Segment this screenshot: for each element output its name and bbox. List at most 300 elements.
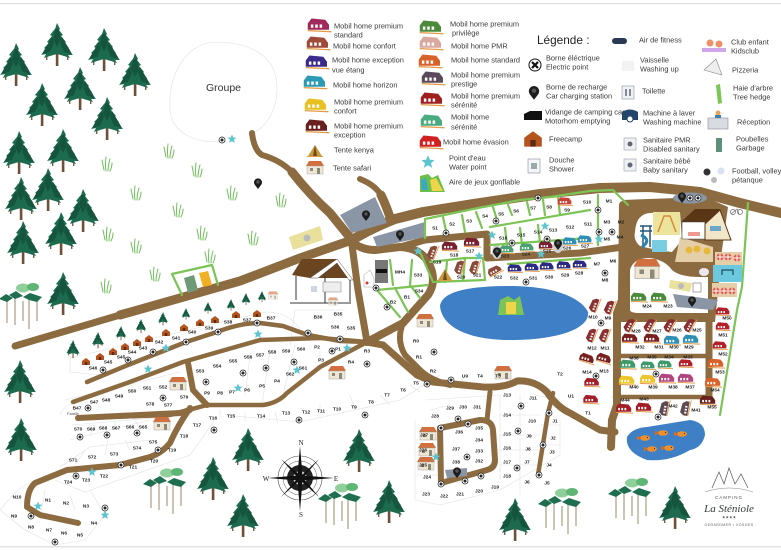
plot numbers: M37 [685, 384, 695, 390]
logo: camping La Sténiole [703, 468, 754, 527]
plot numbers: J37 [452, 446, 460, 452]
plot numbers: P8 [217, 390, 223, 396]
plot numbers: S15 [517, 232, 526, 238]
plot numbers: S65 [139, 424, 148, 430]
plot numbers: S69 [87, 426, 96, 432]
plot numbers: T23 [82, 478, 90, 484]
plot numbers: N7 [46, 528, 52, 534]
legend: services column 5: pétanque [732, 176, 763, 184]
garbage area bins [184, 271, 212, 293]
legend: services column 5: Pizzeria [732, 66, 759, 74]
plot numbers: P9 [204, 390, 210, 396]
plot numbers: J33 [475, 448, 483, 454]
plot numbers: T5 [413, 380, 419, 386]
legend: services column 4: Washing up [640, 64, 679, 74]
plot numbers: S27 [581, 244, 590, 250]
legend: mobile homes column 2: Mobil home standard [451, 56, 520, 64]
plot numbers: S60 [297, 346, 306, 352]
plot numbers: M6 [610, 258, 617, 264]
plot numbers: J6 [524, 480, 530, 486]
legend: mobile homes column 2: privilège [452, 28, 480, 38]
plot numbers: S17 [466, 248, 475, 254]
plot numbers: M9 [605, 316, 612, 322]
plot numbers: T6 [400, 388, 406, 394]
plot numbers: S41 [172, 336, 181, 342]
legend: mobile homes column 2: sérénité [451, 122, 477, 132]
plot numbers: S24 [522, 252, 531, 258]
legend: services column 4: Sanitaire PMR [643, 136, 691, 144]
main building [290, 259, 353, 304]
logo: camping La Sténiole: ★★★★ [722, 514, 737, 520]
plot numbers: M14 [582, 370, 592, 376]
legend: services column 4: Toilette [642, 86, 665, 96]
legend: services column 5: Haie d'arbre [733, 84, 773, 92]
legend: services column 3: Vidange de camping car [545, 108, 625, 116]
plot numbers: R3 [364, 348, 370, 354]
plot numbers: M42 [668, 404, 678, 410]
plot numbers: T12 [302, 410, 310, 416]
plot numbers: M53 [715, 370, 725, 376]
legend: services column 5: Poubelles [736, 134, 769, 144]
legend: mobile homes column 2: Mobil home premium [450, 20, 519, 28]
plot numbers: T1 [585, 410, 591, 416]
plot numbers: S79 [180, 394, 189, 400]
legend: mobile homes column 1 [304, 18, 404, 174]
plot numbers: M2 [618, 220, 625, 226]
plot numbers: M10 [588, 314, 598, 320]
plot numbers: J23 [422, 492, 430, 498]
plot numbers: J10 [528, 418, 536, 424]
plot numbers: S55 [229, 358, 238, 364]
plot numbers: N4 [91, 520, 97, 526]
plot numbers: J20 [475, 488, 483, 494]
legend: mobile homes column 2: Aire de jeux gonflable [449, 178, 520, 186]
legend: mobile homes column 2: Point d'eau [449, 154, 486, 162]
plot numbers: J8 [525, 446, 531, 452]
legend: services column 3: Borne éléctrique [546, 54, 600, 62]
plot numbers: N3 [83, 504, 89, 510]
plot numbers: J1 [552, 418, 558, 424]
plot numbers: T21 [129, 464, 137, 470]
plot numbers: J32 [475, 458, 483, 464]
legend: mobile homes column 2: sérénité [451, 100, 477, 110]
plot numbers: P3 [318, 358, 324, 364]
legend: mobile homes column 2: Mobil home PMR [451, 42, 508, 50]
logo: camping La Sténiole: CAMPING [715, 495, 743, 500]
plot numbers: S54 [213, 364, 222, 370]
plot numbers: P6 [244, 388, 250, 394]
plot numbers: S32 [510, 276, 519, 282]
plot numbers: T20 [150, 458, 158, 464]
plot numbers: S9 [564, 208, 570, 214]
plot numbers: M5 [604, 236, 611, 242]
compass rose: E [334, 475, 338, 483]
legend: services column 5: Tree hedge [733, 92, 771, 102]
plot numbers: S56 [244, 354, 253, 360]
plot numbers: B36 [314, 314, 323, 320]
legend: mobile homes column 2: Mobil home premium [451, 92, 520, 100]
plot numbers: M4 [617, 234, 624, 240]
plot numbers: M34 [664, 354, 674, 360]
plot numbers: S78 [146, 402, 155, 408]
plot numbers [11, 198, 732, 538]
plot numbers: J35 [475, 426, 483, 432]
legend: services column 3: Shower [549, 164, 575, 174]
plot numbers: P1 [335, 346, 341, 352]
plot numbers: T4 [477, 374, 483, 380]
plot numbers: B47 [73, 406, 82, 412]
logo: camping La Sténiole: GERARDMER • VOSGES [704, 523, 754, 527]
plot numbers: S16 [499, 236, 508, 242]
plot numbers: S22 [494, 274, 503, 280]
plot numbers: S25 [543, 248, 552, 254]
plot numbers: M8 [602, 278, 609, 284]
compass rose: N [298, 439, 304, 447]
plot numbers: J18 [503, 474, 511, 480]
plot numbers: N5 [77, 532, 83, 538]
small pines row [66, 291, 266, 358]
plot numbers: J36 [455, 430, 463, 436]
plot numbers: S12 [566, 224, 575, 230]
legend: services column 3: Electric point [546, 62, 588, 72]
plot numbers: R0 [413, 338, 419, 344]
legend: mobile homes column 1: confort [334, 106, 357, 116]
plot numbers: S74 [133, 446, 142, 452]
plot numbers: M30 [669, 344, 679, 350]
parking areas [340, 192, 718, 478]
legend: mobile homes column 1: Mobil home confort [333, 42, 396, 50]
legend: mobile homes column 1: Tente safari [333, 164, 372, 172]
plot numbers: T8 [368, 400, 374, 406]
plot numbers: J5 [544, 480, 550, 486]
plot numbers: J25 [419, 462, 427, 468]
plot numbers: M35 [647, 354, 657, 360]
plot numbers: M29 [684, 344, 694, 350]
plot numbers: S39 [205, 326, 214, 332]
plot numbers: S8 [546, 204, 552, 210]
legend: services column 3: Borne de recharge [546, 82, 607, 92]
plot numbers: J38 [452, 460, 460, 466]
plot numbers: B37 [267, 316, 276, 322]
plot numbers: S52 [159, 384, 168, 390]
plot numbers: S46 [89, 366, 98, 372]
legend: services column 4: Disabled sanitary [643, 144, 700, 154]
plot numbers: T13 [282, 410, 290, 416]
plot numbers: S59 [282, 348, 291, 354]
plot numbers: M24 [642, 304, 652, 310]
plot numbers: S62 [286, 372, 295, 378]
plot numbers: T9 [351, 404, 357, 410]
camping car station and reception [364, 269, 387, 287]
plot numbers: S21 [473, 272, 482, 278]
legend: services column 3: Douche [549, 156, 574, 164]
legend: services column 3: Car charging station [546, 92, 612, 100]
plot numbers: S23 [501, 254, 510, 260]
plot numbers: N9 [11, 514, 17, 520]
plot numbers: M26 [672, 328, 682, 334]
plot numbers: J29 [446, 406, 454, 412]
plot numbers: T14 [257, 414, 265, 420]
Family sublabel: Family [67, 411, 79, 416]
plot numbers: S7 [530, 206, 536, 212]
lake with inflatable slide [440, 286, 588, 340]
legend: services column 4: Air de fitness [639, 36, 682, 44]
plot numbers: S71 [69, 458, 78, 464]
freecamp huts [82, 310, 261, 365]
logo: camping La Sténiole: La Sténiole [703, 503, 754, 515]
plot numbers: M40 [629, 384, 639, 390]
plot numbers: S47 [90, 400, 99, 406]
plot numbers: S53 [196, 368, 205, 374]
plot numbers: S40 [188, 330, 197, 336]
plot numbers: T15 [227, 414, 235, 420]
plot numbers: S28 [575, 270, 584, 276]
plot numbers: J21 [456, 492, 464, 498]
plot numbers: S34 [415, 288, 424, 294]
plot numbers: M43 [639, 396, 649, 402]
plot numbers: S45 [117, 354, 126, 360]
plot numbers: M54 [710, 388, 720, 394]
plot numbers: T2 [557, 372, 563, 378]
plot numbers: M7 [594, 262, 601, 268]
legend: services column 4: Sanitaire bébé [643, 156, 691, 166]
plot numbers: R4 [348, 360, 354, 366]
plot numbers: J2 [550, 436, 556, 442]
plot numbers: B35 [334, 312, 343, 318]
plot numbers: B1 [404, 294, 410, 300]
compass rose [263, 439, 338, 519]
plot numbers: J30 [459, 404, 467, 410]
plot numbers: J31 [473, 404, 481, 410]
legend: mobile homes column 1: Mobil home premium [334, 122, 403, 130]
plot numbers: P2 [314, 344, 320, 350]
plot numbers: S20 [457, 274, 466, 280]
plot numbers: J13 [503, 392, 511, 398]
plot outlines [0, 42, 560, 545]
plot numbers: M1 [606, 198, 613, 204]
plot numbers: S66 [126, 424, 135, 430]
plot numbers: S1 [432, 226, 438, 232]
legend: mobile homes column 1: exception [334, 130, 366, 140]
plot numbers: J16 [503, 446, 511, 452]
legend: mobile homes column 2: Mobil home évasion [443, 138, 509, 146]
roads [15, 133, 781, 523]
legend: services column 4: Machine à laver [643, 108, 696, 118]
yellow sports pitch [289, 226, 323, 250]
plot numbers: S49 [115, 394, 124, 400]
legend: services column 5 [702, 38, 781, 184]
plot numbers: S57 [256, 352, 265, 358]
plot numbers: T17 [193, 422, 201, 428]
plot numbers: MH4 [395, 270, 405, 276]
plot numbers: J15 [503, 432, 511, 438]
plot numbers: M3 [604, 220, 611, 226]
plot numbers: M52 [718, 352, 728, 358]
legend: mobile homes column 2 [419, 20, 520, 192]
plot numbers: S58 [268, 350, 277, 356]
plot numbers: M13 [599, 368, 609, 374]
plot numbers: N2 [63, 500, 69, 506]
plot numbers: T24 [64, 480, 72, 486]
legend: services column 5: Réception [737, 118, 770, 126]
plot numbers: S45 [104, 360, 113, 366]
legend: services column 3 [524, 54, 625, 174]
plot numbers: N6 [61, 530, 67, 536]
plot numbers: S70 [74, 426, 83, 432]
plot numbers: M38 [668, 384, 678, 390]
plot numbers: J9 [526, 434, 532, 440]
plot numbers: S42 [155, 340, 164, 346]
legend: mobile homes column 1: Mobil home horizon [333, 80, 398, 90]
plot numbers: M51 [718, 332, 728, 338]
plot numbers: T18 [180, 434, 188, 440]
plot numbers: P4 [274, 378, 280, 384]
plot numbers: S67 [112, 426, 121, 432]
plot numbers: S44 [128, 350, 137, 356]
plot numbers: M25 [692, 328, 702, 334]
plot numbers: J34 [475, 438, 483, 444]
legend: mobile homes column 1: Tente kenya [334, 146, 375, 154]
legend: mobile homes column 1: vue étang [332, 66, 364, 74]
plot numbers: S75 [149, 440, 158, 446]
plot numbers: T16 [209, 416, 217, 422]
plot numbers: J28 [431, 414, 439, 420]
plot numbers: J27 [420, 432, 428, 438]
plot numbers: S13 [549, 228, 558, 234]
legend: mobile homes column 1: Mobil home premium [334, 22, 403, 30]
plot numbers: S61 [299, 366, 308, 372]
plot numbers: T22 [100, 474, 108, 480]
plot numbers: J14 [503, 412, 511, 418]
compass rose: S [299, 511, 303, 519]
Groupe area label: Groupe [206, 82, 241, 94]
plot numbers: S5 [498, 212, 504, 218]
plot numbers: M44 [620, 398, 630, 404]
plot numbers: M39 [648, 384, 658, 390]
electric points [28, 137, 701, 545]
plot numbers: J22 [440, 494, 448, 500]
plot numbers: S36 [331, 324, 340, 330]
plot numbers: M41 [691, 408, 701, 414]
plot numbers: P7 [229, 390, 235, 396]
plot numbers: S35 [347, 326, 356, 332]
plot numbers: S14 [534, 230, 543, 236]
plot numbers: S72 [88, 454, 97, 460]
plot numbers: N8 [28, 524, 34, 530]
plot numbers: R1 [416, 354, 422, 360]
legend: services column 5: Club enfant [731, 38, 769, 46]
legend: services column 5: Garbage [736, 144, 765, 152]
plot numbers: T10 [333, 406, 341, 412]
birch groves [0, 283, 651, 534]
plot numbers: J26 [419, 448, 427, 454]
bungalow houses [153, 259, 660, 470]
grass tufts [101, 144, 286, 293]
plot numbers: M36 [629, 356, 639, 362]
plot numbers: P5 [259, 384, 265, 390]
legend: services column 4 [612, 36, 701, 174]
plot numbers: R2 [430, 368, 436, 374]
plot numbers: M33 [683, 354, 693, 360]
plot numbers: B2 [390, 300, 396, 306]
legend: mobile homes column 2: Water point [449, 162, 487, 172]
water points [34, 134, 603, 519]
playground, pool and restaurant resort [640, 209, 742, 297]
plot numbers: J7 [524, 460, 530, 466]
compass rose: W [263, 475, 270, 483]
plot numbers: U9 [462, 374, 468, 380]
plot numbers: S19 [433, 260, 442, 266]
plot numbers: S31 [529, 276, 538, 282]
plot numbers: M27 [652, 328, 662, 334]
plot numbers: M50 [722, 316, 732, 322]
plot numbers: U1 [568, 394, 574, 400]
plot numbers: M55 [707, 404, 717, 410]
plot numbers: S29 [561, 272, 570, 278]
plot numbers: J3 [549, 450, 555, 456]
plot numbers: T7 [384, 392, 390, 398]
legend: mobile homes column 2: Mobil home premium [451, 70, 520, 80]
plot numbers: S26 [563, 246, 572, 252]
plot numbers: T11 [317, 408, 325, 414]
plot numbers: S68 [99, 426, 108, 432]
plot numbers: S51 [143, 386, 152, 392]
plot numbers: S37 [243, 318, 252, 324]
plot numbers: S38 [224, 320, 233, 326]
plot numbers: S48 [102, 398, 111, 404]
legend: services column 3: Motorhom emptying [545, 116, 610, 126]
plot numbers: S6 [513, 208, 519, 214]
plot numbers: T3 [495, 374, 501, 380]
legend: mobile homes column 1: Mobil home exception [332, 56, 404, 64]
plot numbers: S33 [414, 272, 423, 278]
plot numbers: S2 [449, 222, 455, 228]
legend: services column 3: Freecamp [549, 134, 582, 144]
plot numbers: N1 [45, 498, 51, 504]
plot numbers: S73 [110, 452, 119, 458]
plot numbers: M11 [600, 346, 610, 352]
plot numbers: M28 [631, 328, 641, 334]
legend heading: Légende : [537, 33, 589, 47]
plot numbers: M31 [654, 344, 664, 350]
plot numbers: S4 [482, 214, 488, 220]
plot numbers: T19 [168, 448, 176, 454]
legend: mobile homes column 2: Mobil home [451, 112, 489, 122]
mobile homes on the map [426, 197, 731, 416]
plot numbers: M12 [587, 346, 597, 352]
plot numbers: S50 [128, 388, 137, 394]
plot numbers: J11 [529, 396, 537, 402]
plot numbers: J19 [491, 484, 499, 490]
plot numbers: J17 [503, 460, 511, 466]
legend: services column 4: Vaisselle [640, 56, 669, 64]
legend: services column 5: Kidsclub [731, 46, 759, 56]
legend: services column 4: Washing machine [643, 118, 701, 126]
green tree hedges [172, 190, 748, 415]
plot numbers: S3 [466, 218, 472, 224]
legend: mobile homes column 2: prestige [451, 80, 477, 88]
plot numbers: S30 [545, 274, 554, 280]
plot numbers: S77 [164, 402, 173, 408]
plot numbers: M23 [663, 304, 673, 310]
plot numbers: M32 [635, 344, 645, 350]
plot numbers: J4 [546, 462, 552, 468]
charging pins [254, 178, 696, 478]
legend: services column 4: Baby sanitary [643, 166, 688, 174]
plot numbers: S18 [450, 252, 459, 258]
plot numbers: J24 [423, 474, 431, 480]
legend: mobile homes column 1: standard [334, 30, 363, 40]
